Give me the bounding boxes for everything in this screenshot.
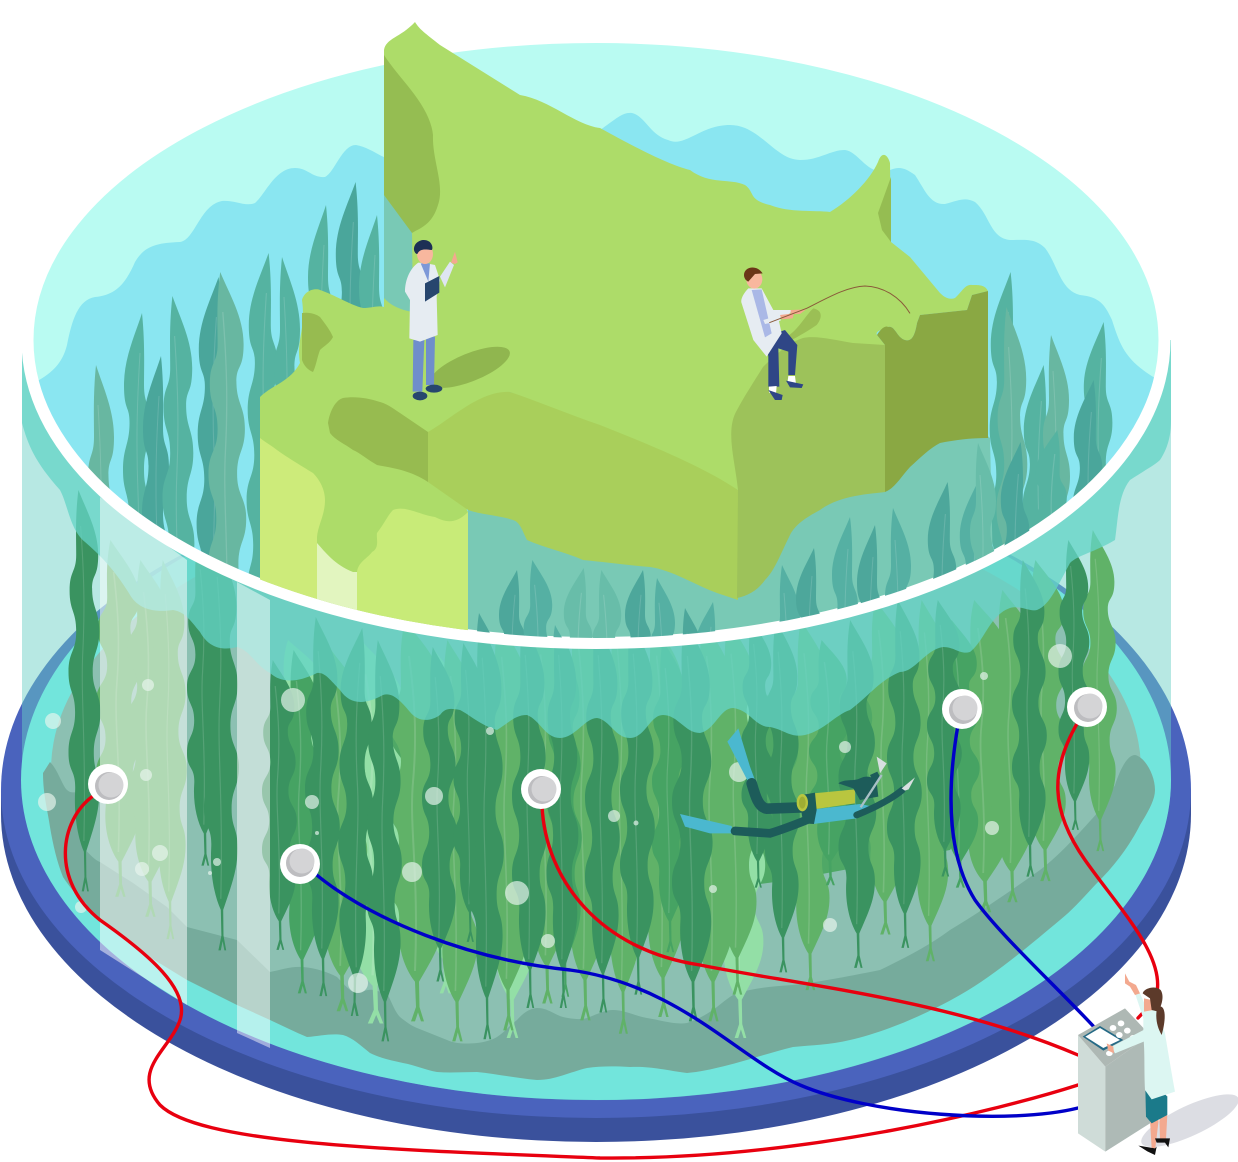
electrodes (88, 687, 1107, 884)
operator figure (1107, 973, 1175, 1155)
wires (65, 722, 1158, 1158)
front glass wave band (22, 340, 1171, 738)
island top face (260, 22, 988, 645)
light reflections on glass (100, 497, 270, 1048)
back kelp row (87, 182, 1114, 811)
island far-left water gap (384, 195, 413, 312)
kelp backdrop (275, 645, 985, 900)
base disk: blue platform (1, 462, 1191, 1142)
scientist with clipboard (405, 240, 515, 400)
island cliff: far left (384, 55, 440, 233)
bubbles (38, 644, 1072, 993)
island lower left bright faces (260, 438, 325, 599)
operator shadow (1135, 1085, 1238, 1157)
cyan inner disk (21, 460, 1171, 1100)
sea floor (43, 485, 1155, 1080)
scientist fishing (741, 267, 910, 400)
kelp forest: lower green blades (68, 490, 1117, 1041)
back water wall (38, 112, 1154, 574)
island dark patches (302, 313, 333, 372)
glass cylinder wall tint (22, 340, 1171, 1100)
tank water: top surface seen from above (34, 43, 1158, 637)
operator at control console (1078, 973, 1238, 1157)
island (260, 22, 988, 650)
diver (680, 728, 915, 833)
control console (1078, 1008, 1150, 1152)
island side faces (428, 392, 738, 600)
front kelp tips inside tank (477, 442, 1030, 638)
island spike side (878, 177, 891, 242)
tank rim: white ring (28, 37, 1164, 643)
middle water band (468, 344, 992, 637)
